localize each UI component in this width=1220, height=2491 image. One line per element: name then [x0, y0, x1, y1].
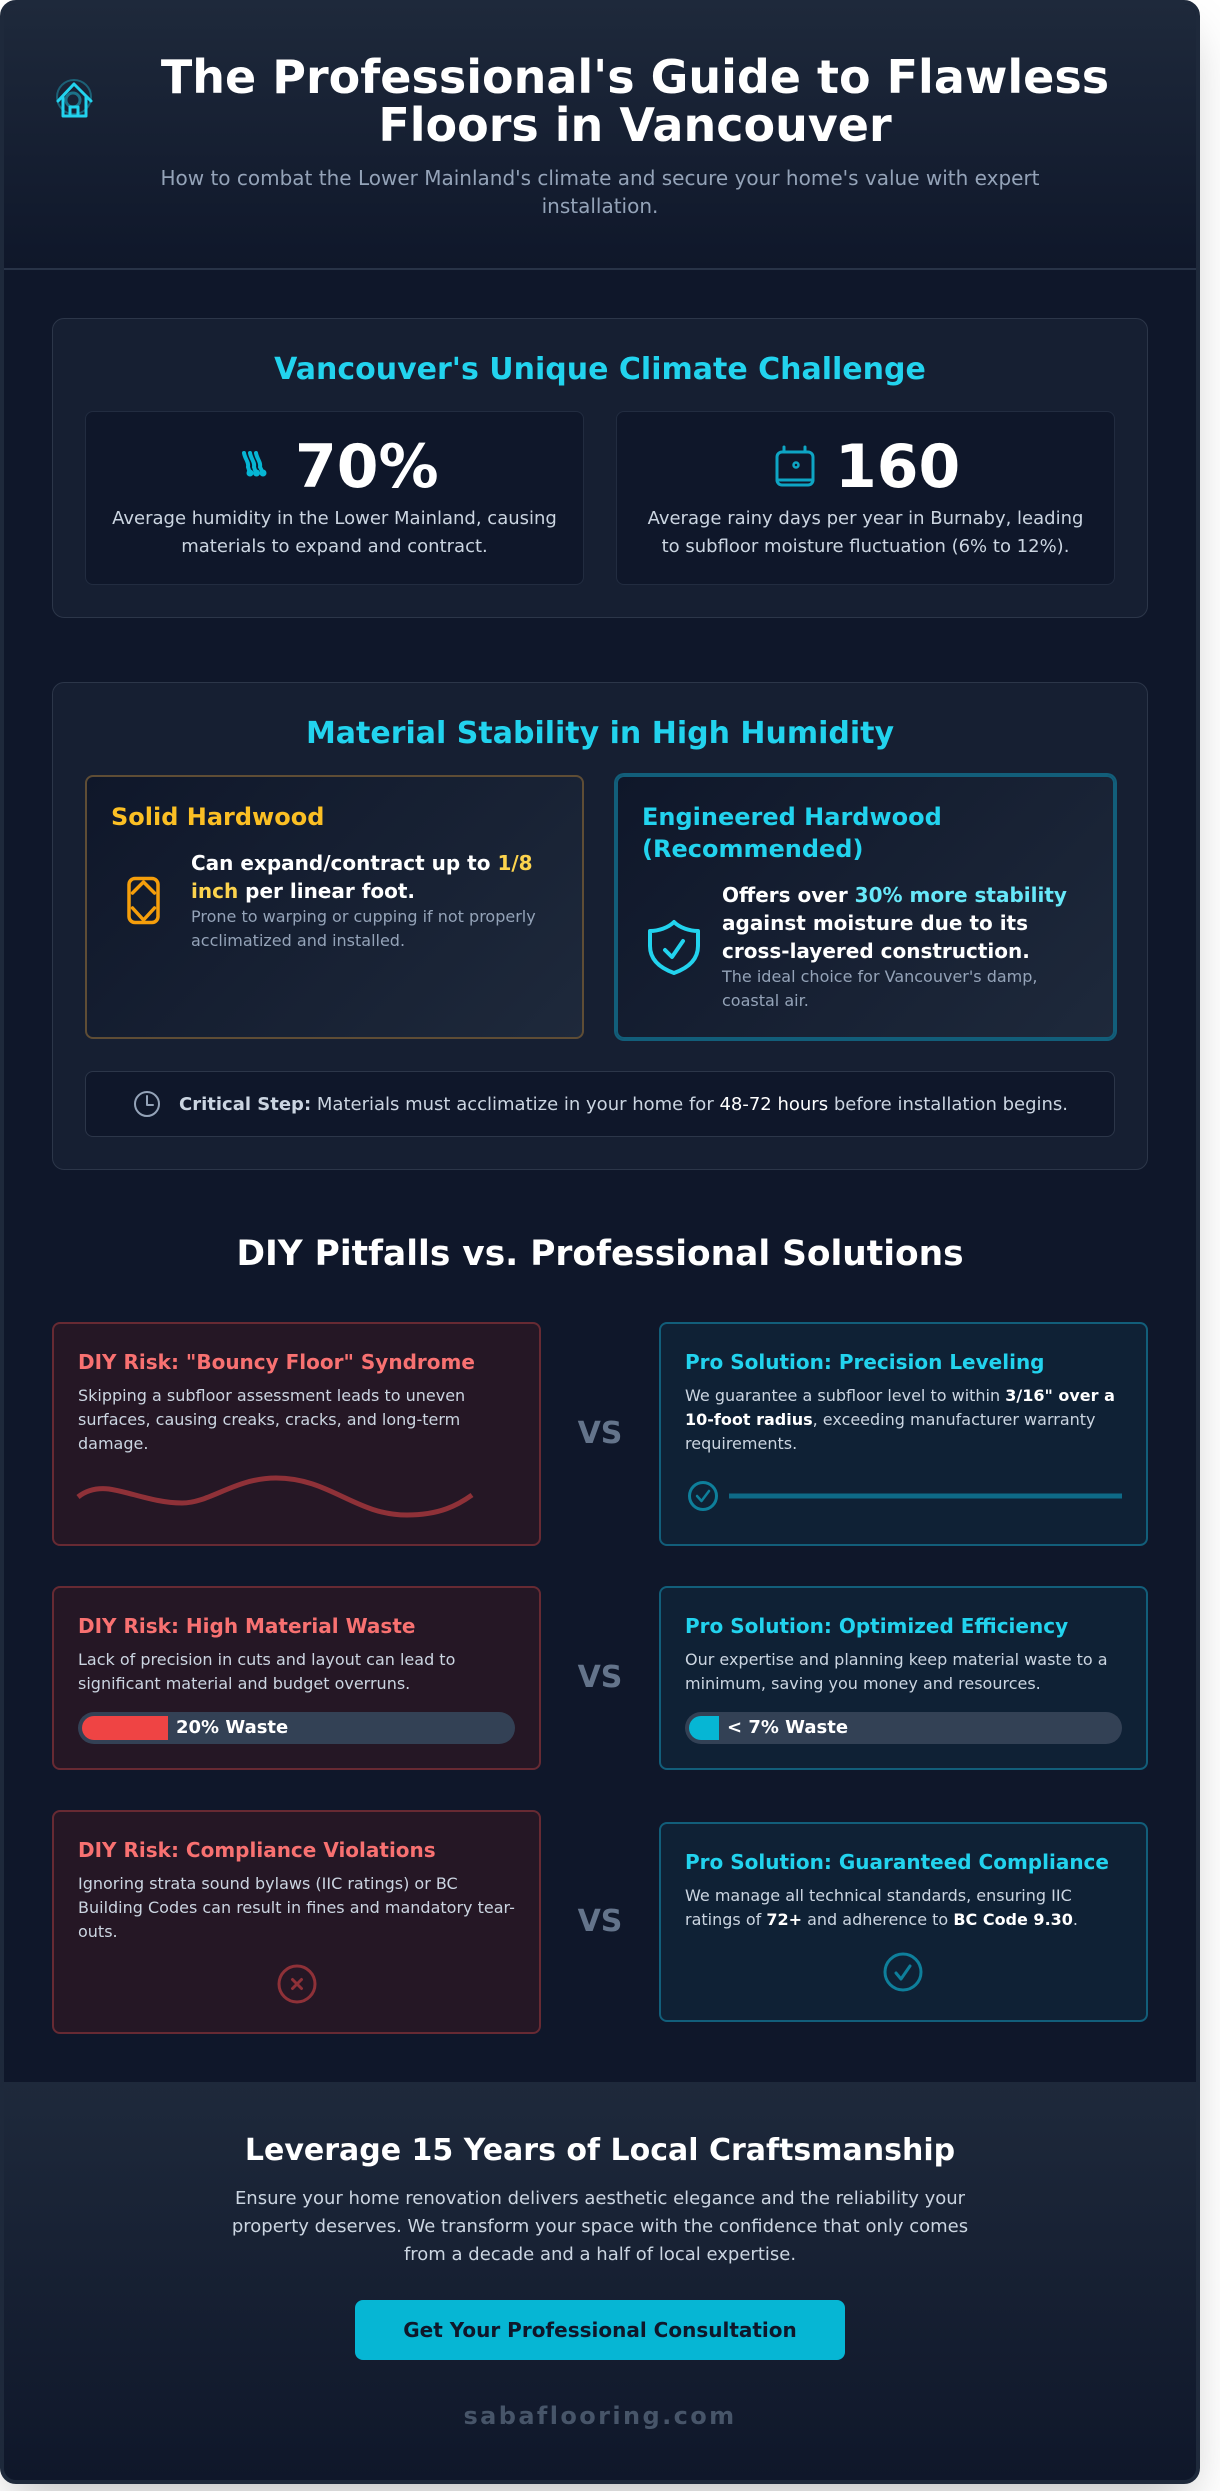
icon: house [56, 79, 93, 118]
text: engineered hardwood fact: cross-layered construction. [722, 939, 1030, 963]
subtitle: installation. [542, 194, 658, 218]
text: precision leveling: 10-foot radius, exceeding manufacturer warranty [685, 1410, 1096, 1429]
text: bouncy floor risk: Skipping a subfloor assessment leads to uneven [78, 1386, 465, 1405]
card: bouncy floor risk [52, 1322, 541, 1546]
heading: engineered hardwood: (Recommended) [642, 835, 863, 863]
heading: material waste risk: DIY Risk: High Material Waste [78, 1614, 415, 1638]
subtitle [160, 166, 1040, 218]
heading: solid hardwood: Solid Hardwood [111, 803, 324, 831]
website: sabaflooring.com [463, 2402, 737, 2430]
bar: 20% waste: 20% Waste [176, 1717, 288, 1738]
text: compliance risk [78, 1874, 515, 1941]
title [161, 50, 1109, 152]
subtitle: How to combat the Lower Mainland's climate and secure your home's value with expert [160, 166, 1040, 190]
stat description: humidity [112, 508, 557, 557]
icon: expansion [127, 876, 160, 924]
panel: climate challenge [52, 318, 1148, 618]
heading: engineered hardwood [642, 803, 942, 863]
footer text: Ensure your home renovation delivers aesthetic elegance and the reliability your [235, 2188, 965, 2209]
panel: material stability [52, 682, 1148, 1170]
stat description: rainy days [648, 508, 1083, 557]
text: bouncy floor risk: surfaces, causing creaks, cracks, and long-term [78, 1410, 460, 1429]
footer text: property deserves. We transform your space with the confidence that only comes [232, 2216, 968, 2237]
text: engineered hardwood note [722, 967, 1037, 1010]
card: precision leveling [659, 1322, 1148, 1546]
text: bouncy floor risk: damage. [78, 1434, 148, 1453]
heading: climate challenge: Vancouver's Unique Climate Challenge [274, 352, 926, 387]
icon: cross in circle [278, 1964, 316, 2004]
text: compliance risk: Building Codes can result in fines and mandatory tear- [78, 1898, 515, 1917]
bar: under 7% waste [685, 1712, 1122, 1744]
heading: DIY vs professional: DIY Pitfalls vs. Professional Solutions [236, 1234, 964, 1274]
text: guaranteed compliance: We manage all technical standards, ensuring IIC [685, 1886, 1072, 1905]
stat card: humidity [85, 411, 584, 585]
text: bouncy floor risk [78, 1386, 465, 1453]
versus label 1: VS [578, 1416, 622, 1451]
versus label 3: VS [578, 1904, 622, 1939]
text: solid hardwood note [191, 907, 536, 950]
callout: critical step [85, 1071, 1115, 1137]
text: solid hardwood fact [191, 851, 533, 903]
text: engineered hardwood note: coastal air. [722, 991, 809, 1010]
icon: shield [648, 920, 700, 975]
text: precision leveling: requirements. [685, 1434, 797, 1453]
stat description: rainy days: Average rainy days per year in Burnaby, leading [648, 508, 1083, 529]
stat description: humidity: materials to expand and contract. [181, 536, 488, 557]
title: The Professional's Guide to Flawless [161, 50, 1109, 104]
footer [4, 2082, 1196, 2480]
bar: 20% waste [78, 1712, 515, 1744]
button: consultation: Get Your Professional Consultation [403, 2318, 797, 2342]
text: material waste risk [78, 1650, 455, 1693]
heading: bouncy floor risk: DIY Risk: "Bouncy Floor" Syndrome [78, 1350, 475, 1374]
versus label 2: VS [578, 1660, 622, 1695]
heading: compliance risk: DIY Risk: Compliance Violations [78, 1838, 436, 1862]
text: engineered hardwood fact [722, 883, 1067, 963]
text: optimized efficiency: minimum, saving you money and resources. [685, 1674, 1041, 1693]
stat number: 70%: 70% [295, 432, 439, 502]
card: solid hardwood [85, 775, 584, 1039]
heading: engineered hardwood: Engineered Hardwood [642, 803, 942, 831]
card: compliance risk [52, 1810, 541, 2034]
icon: uneven floor wave [76, 1476, 474, 1518]
heading: material stability: Material Stability in High Humidity [306, 716, 894, 751]
card: material waste risk [52, 1586, 541, 1770]
icon: level line with check [688, 1481, 1122, 1511]
stat number: 160: 160 [835, 432, 960, 502]
button: consultation [355, 2300, 845, 2360]
stat card: rainy days [616, 411, 1115, 585]
text: solid hardwood fact: Can expand/contract up to 1/8 [191, 851, 533, 875]
icon: check in circle [884, 1952, 922, 1992]
footer heading: Leverage 15 Years of Local Craftsmanship [245, 2133, 955, 2168]
header [4, 4, 1196, 270]
bar: under 7% waste: < 7% Waste [727, 1717, 848, 1738]
text: compliance risk: Ignoring strata sound bylaws (IIC ratings) or BC [78, 1874, 458, 1893]
text: engineered hardwood note: The ideal choice for Vancouver's damp, [722, 967, 1037, 986]
icon: humidity waves [242, 451, 266, 476]
text: compliance risk: outs. [78, 1922, 118, 1941]
text: material waste risk: significant material and budget overruns. [78, 1674, 410, 1693]
stat description: rainy days: to subfloor moisture fluctuation (6% to 12%). [662, 536, 1069, 557]
text: optimized efficiency [685, 1650, 1108, 1693]
footer text: from a decade and a half of local expertise. [404, 2244, 796, 2265]
text: solid hardwood fact: inch per linear foot. [191, 879, 415, 903]
heading: optimized efficiency: Pro Solution: Optimized Efficiency [685, 1614, 1068, 1638]
card: guaranteed compliance [659, 1822, 1148, 2022]
title: Floors in Vancouver [378, 98, 892, 152]
card: optimized efficiency [659, 1586, 1148, 1770]
text: material waste risk: Lack of precision in cuts and layout can lead to [78, 1650, 455, 1669]
heading: precision leveling: Pro Solution: Precision Leveling [685, 1350, 1044, 1374]
text: solid hardwood note: acclimatized and installed. [191, 931, 405, 950]
heading: guaranteed compliance: Pro Solution: Guaranteed Compliance [685, 1850, 1109, 1874]
icon: calendar [776, 446, 814, 486]
text: guaranteed compliance: ratings of 72+ and adherence to BC Code 9.30. [685, 1910, 1078, 1929]
card: engineered hardwood [616, 775, 1115, 1039]
icon: clock [134, 1091, 160, 1117]
text: guaranteed compliance [685, 1886, 1078, 1929]
text: engineered hardwood fact: Offers over 30% more stability [722, 883, 1067, 907]
text: precision leveling: We guarantee a subfloor level to within 3/16" over a [685, 1386, 1115, 1405]
text: optimized efficiency: Our expertise and planning keep material waste to a [685, 1650, 1108, 1669]
text: precision leveling [685, 1386, 1115, 1453]
text: engineered hardwood fact: against moisture due to its [722, 911, 1028, 935]
footer text [232, 2188, 968, 2265]
text: solid hardwood note: Prone to warping or cupping if not properly [191, 907, 536, 926]
text: critical step: Critical Step: Materials must acclimatize in your home for 48-72 hours before installation begins. [179, 1094, 1068, 1115]
stat description: humidity: Average humidity in the Lower Mainland, causing [112, 508, 557, 529]
